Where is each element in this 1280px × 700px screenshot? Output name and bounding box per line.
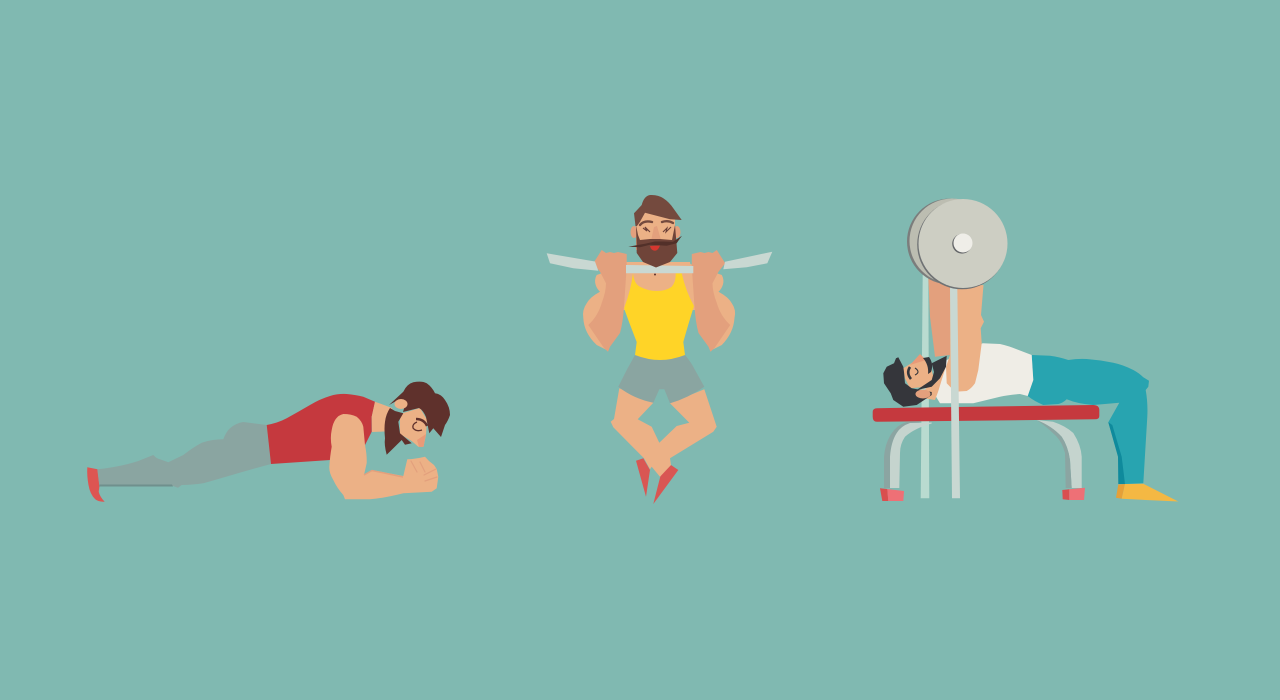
plank face xyxy=(400,408,427,447)
figure: man doing a squat with a barbell xyxy=(547,195,772,504)
left upper arm xyxy=(583,263,631,350)
trouser shadow xyxy=(1108,422,1125,484)
front weight plate xyxy=(917,199,1008,289)
squat ears xyxy=(630,226,680,238)
press moustache xyxy=(923,357,932,374)
near arm xyxy=(946,285,984,392)
right leg tube xyxy=(1037,420,1082,488)
squat right arm xyxy=(688,250,735,352)
press trousers xyxy=(1028,355,1149,484)
press hair xyxy=(883,357,932,407)
plank hair xyxy=(389,382,450,437)
plank shoe xyxy=(87,467,105,502)
press eyebrow and closed eye xyxy=(908,367,918,379)
plank neck xyxy=(372,402,398,432)
squat barbell xyxy=(547,252,772,273)
press nose xyxy=(910,354,926,365)
plank ear xyxy=(394,399,408,409)
figure: man doing a bench press xyxy=(873,198,1178,502)
squat nose xyxy=(651,226,661,241)
plate hub xyxy=(952,234,972,254)
bench pad xyxy=(873,405,1099,422)
left leg tube xyxy=(890,422,932,488)
plank fingers xyxy=(411,461,437,481)
press face xyxy=(903,357,933,388)
squat chest xyxy=(622,262,696,310)
squat shorts xyxy=(618,355,704,403)
press shoe xyxy=(1116,484,1178,502)
left forearm and fist xyxy=(588,250,627,352)
squat eyebrows xyxy=(640,221,673,225)
bench left leg xyxy=(884,422,932,488)
squat closed eyes xyxy=(643,227,671,232)
plank beard xyxy=(384,408,412,455)
left foot xyxy=(880,488,888,501)
plank closed eye xyxy=(413,419,427,431)
far barbell bar xyxy=(921,275,929,498)
right foot xyxy=(1062,489,1069,500)
squat legs xyxy=(611,388,717,477)
left leg shadow xyxy=(884,422,920,488)
squat necklace xyxy=(654,274,656,276)
squat tank top xyxy=(624,273,694,360)
press neck xyxy=(922,366,946,400)
squat hair xyxy=(634,195,682,226)
squat left arm xyxy=(583,250,631,352)
press beard xyxy=(917,356,947,390)
right leg shadow xyxy=(1037,420,1072,488)
squat mouth xyxy=(650,246,660,251)
plank shirt xyxy=(267,394,375,464)
right upper arm xyxy=(688,263,735,350)
right forearm and fist xyxy=(692,250,730,352)
far arm xyxy=(928,277,952,357)
squat moustache xyxy=(628,236,682,247)
squat face xyxy=(636,212,675,250)
back weight plate xyxy=(907,198,994,284)
bench right leg xyxy=(1037,420,1082,488)
plank leggings xyxy=(97,422,271,488)
figure: man doing a plank xyxy=(87,382,450,502)
squat shoes xyxy=(636,458,678,504)
plank shoe-side legging shadow xyxy=(99,484,173,486)
plank arm xyxy=(329,414,438,499)
plank nose xyxy=(417,434,426,447)
near barbell bar xyxy=(950,287,960,498)
press ear xyxy=(916,390,930,398)
bench feet xyxy=(880,488,1085,501)
plank arm crease xyxy=(364,470,403,477)
press shirt xyxy=(935,343,1033,403)
squat beard xyxy=(636,225,677,268)
